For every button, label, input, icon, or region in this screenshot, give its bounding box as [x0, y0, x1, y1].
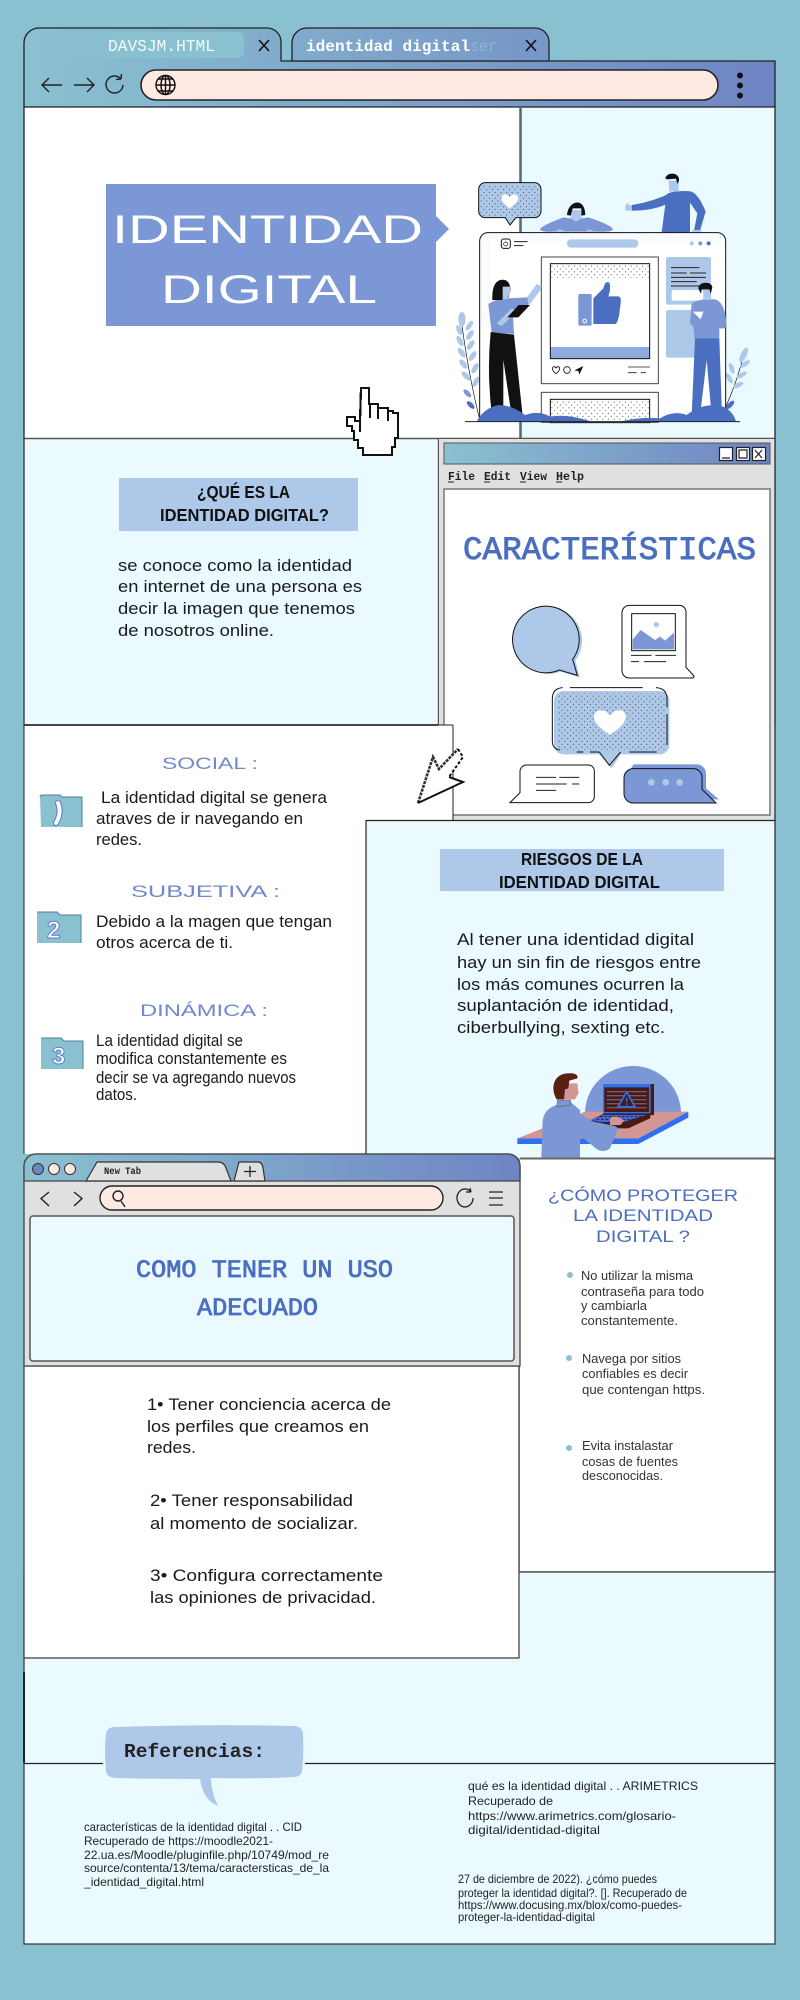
bullet 3: Evita instalastar — [582, 1439, 673, 1453]
second post card — [541, 392, 658, 422]
subjetiva text — [96, 912, 332, 952]
round bubble — [513, 606, 582, 678]
illustration: chat bubbles — [510, 605, 719, 803]
icon: search — [113, 1191, 125, 1207]
content area — [444, 489, 770, 815]
icon: back arrow — [42, 78, 62, 92]
references left — [83, 1820, 329, 1889]
panel: como tener un uso adecuado list: 2• Tener responsabilidad — [150, 1491, 353, 1510]
icon: menu dots — [737, 72, 743, 98]
references right 1 — [468, 1779, 698, 1837]
social text: redes. — [96, 830, 142, 849]
tab: new tab: New Tab — [104, 1166, 141, 1178]
bullet 2: que contengan https. — [582, 1383, 705, 1397]
tab: new tab — [86, 1162, 231, 1181]
references right 2: proteger-la-identidad-digital — [458, 1910, 595, 1924]
references right 1: https://www.arimetrics.com/glosario- — [468, 1809, 676, 1823]
body text: ciberbullying, sexting etc. — [457, 1018, 665, 1037]
title bar — [444, 443, 770, 464]
icon: folder 3 — [41, 1038, 83, 1070]
bullet 2: confiables es decir — [582, 1367, 688, 1381]
references left: _identidad_digital.html — [83, 1875, 204, 1889]
subjetiva heading: SUBJETIVA : — [131, 882, 280, 901]
browser tab: identidad digital — [292, 28, 549, 61]
panel: que es la identidad digital — [24, 438, 775, 725]
title block: IDENTIDAD — [112, 208, 423, 252]
tab bar — [24, 1154, 520, 1181]
heading: CARACTERÍSTICAS — [463, 531, 756, 569]
title block — [106, 184, 449, 326]
panel: como tener un uso adecuado list: 3• Configura correctamente — [150, 1566, 383, 1585]
references left: 22.ua.es/Moodle/pluginfile.php/10749/mod_re — [84, 1848, 329, 1862]
browser tab: identidad digital: ser — [470, 38, 497, 56]
icon: folder 2 — [37, 912, 81, 944]
menu: View — [520, 470, 548, 484]
body text: suplantación de identidad, — [457, 996, 674, 1015]
panel: browser window como tener — [24, 1154, 520, 1366]
address bar — [100, 1186, 443, 1210]
bullet 3: cosas de fuentes — [582, 1455, 678, 1469]
heading box: RIESGOS DE LA — [521, 849, 643, 869]
menu: File — [448, 470, 475, 484]
panel: riesgos — [366, 820, 775, 1158]
references right 2: proteger la identidad digital?. []. Recuperado de — [458, 1886, 687, 1900]
heart bubble — [552, 688, 669, 768]
panel: caracteristicas window — [439, 438, 775, 821]
references left: source/contenta/13/tema/caractersticas_de_la — [84, 1861, 329, 1875]
bullet 2: Navega por sitios — [582, 1352, 681, 1366]
heading box: IDENTIDAD DIGITAL? — [160, 505, 329, 525]
icon: globe — [156, 76, 175, 94]
menu — [448, 470, 584, 484]
body text: decir la imagen que tenemos — [118, 599, 355, 618]
top man — [625, 174, 706, 237]
body text: hay un sin fin de riesgos entre — [457, 953, 701, 972]
man with phone — [690, 283, 727, 416]
heading — [136, 1256, 393, 1323]
window buttons — [720, 448, 766, 460]
panel: como tener un uso adecuado list: redes. — [147, 1438, 196, 1457]
heart bubble — [479, 183, 541, 225]
plant left — [455, 312, 481, 418]
panel: como tener un uso adecuado list: 1• Tener conciencia acerca de — [147, 1395, 391, 1414]
social text: La identidad digital se genera — [101, 788, 328, 807]
ground — [465, 405, 740, 422]
icon: forward arrow — [74, 78, 94, 92]
references right 2 — [458, 1872, 687, 1924]
browser tab: DAVSJM.HTML: DAVSJM.HTML — [108, 38, 215, 57]
references right 1: qué es la identidad digital . . ARIMETRICS — [468, 1779, 698, 1793]
references right 1: digital/identidad-digital — [468, 1823, 600, 1837]
body text — [457, 930, 701, 1037]
dinamica text — [96, 1031, 296, 1104]
heading: DIGITAL ? — [596, 1228, 690, 1246]
heading box: ¿QUÉ ES LA — [197, 481, 290, 502]
panel: hero right — [521, 107, 775, 438]
menu: Help — [556, 470, 584, 484]
social text — [96, 788, 328, 849]
heading box — [119, 478, 358, 531]
dots bubble — [624, 764, 719, 803]
heading box — [440, 849, 724, 892]
image bubble — [622, 605, 694, 678]
references left: Recuperado de https://moodle2021- — [84, 1834, 273, 1848]
browser toolbar — [24, 61, 775, 107]
callout: referencias — [105, 1725, 303, 1806]
dinamica text: modifica constantemente es — [96, 1049, 287, 1068]
post card — [541, 257, 658, 384]
dinamica text: datos. — [96, 1085, 137, 1104]
panel: como tener un uso adecuado list: las opiniones de privacidad. — [150, 1588, 376, 1607]
references right 2: https://www.docusing.mx/blox/como-puedes- — [458, 1898, 682, 1912]
dinamica heading: DINÁMICA : — [140, 1001, 268, 1020]
body text: los más comunes ocurren la — [457, 975, 685, 994]
illustration: person at laptop with warning — [517, 1066, 688, 1158]
browser tab: DAVSJM.HTML — [24, 28, 281, 62]
references right 1: Recuperado de — [468, 1794, 553, 1808]
heading — [548, 1186, 738, 1246]
icon: reload — [106, 74, 123, 93]
icon: pixel hand cursor — [347, 388, 398, 455]
heading box: IDENTIDAD DIGITAL — [499, 872, 660, 892]
social heading: SOCIAL : — [162, 754, 258, 773]
dinamica text: La identidad digital se — [96, 1031, 243, 1050]
heading: LA IDENTIDAD — [573, 1207, 713, 1225]
heading: ¿CÓMO PROTEGER — [548, 1186, 738, 1205]
bullet 3 — [566, 1439, 678, 1483]
panel: hero left — [24, 107, 520, 438]
nav arrows — [41, 1192, 82, 1206]
woman with tablet — [488, 280, 542, 416]
heading: COMO TENER UN USO — [136, 1256, 393, 1285]
body text: Al tener una identidad digital — [457, 930, 694, 949]
body text: en internet de una persona es — [118, 577, 362, 596]
bullet 1: contraseña para todo — [581, 1285, 704, 1299]
references right 2: 27 de diciembre de 2022). ¿cómo puedes — [458, 1872, 657, 1886]
tab: plus — [234, 1162, 265, 1181]
window dots — [32, 1164, 76, 1174]
bullet 1: y cambiarla — [581, 1299, 647, 1313]
panel: caracteristicas list — [24, 725, 453, 1154]
social text: atraves de ir navegando en — [96, 809, 303, 828]
title block: DIGITAL — [161, 268, 377, 312]
icon: pixel arrow cursor — [418, 749, 463, 803]
icon: thumbs up — [578, 282, 621, 326]
side cards — [666, 257, 711, 305]
body text — [118, 556, 362, 640]
panel: como tener un uso adecuado list — [24, 1366, 519, 1658]
app window — [480, 233, 726, 423]
icon: folder 2: 2 — [47, 917, 60, 944]
subjetiva text: Debido a la magen que tengan — [96, 912, 332, 931]
bullet 3: desconocidas. — [582, 1469, 663, 1483]
illustration: social network window with people — [455, 174, 751, 423]
panel: como tener un uso adecuado list: los perfiles que creamos en — [147, 1417, 369, 1436]
heading: ADECUADO — [197, 1294, 318, 1323]
plant right — [724, 346, 751, 411]
panel: como tener un uso adecuado list: al momento de socializar. — [150, 1514, 358, 1533]
bullet 2 — [566, 1352, 705, 1397]
address bar — [141, 70, 718, 100]
dinamica text: decir se va agregando nuevos — [96, 1068, 296, 1087]
bullet 1: constantemente. — [581, 1314, 678, 1328]
content box — [30, 1216, 514, 1361]
panel: como proteger — [520, 1158, 775, 1572]
subjetiva text: otros acerca de ti. — [96, 933, 233, 952]
bullet 1 — [567, 1269, 704, 1328]
menu: Edit — [484, 470, 511, 484]
bullet 1: No utilizar la misma — [581, 1269, 693, 1283]
body text: se conoce como la identidad — [118, 556, 352, 575]
panel: lower background — [24, 1572, 775, 1944]
icon: reload — [457, 1188, 473, 1207]
icon: folder 1 — [40, 795, 82, 827]
callout: referencias: Referencias: — [124, 1741, 265, 1763]
top woman — [540, 202, 613, 238]
references left: características de la identidad digital . . CID — [84, 1820, 302, 1834]
body text: de nosotros online. — [118, 621, 274, 640]
browser tab: identidad digital: identidad digital — [306, 38, 470, 56]
text bubble — [510, 765, 594, 803]
icon: hamburger — [489, 1192, 503, 1205]
icon: folder 3: 3 — [52, 1043, 65, 1070]
